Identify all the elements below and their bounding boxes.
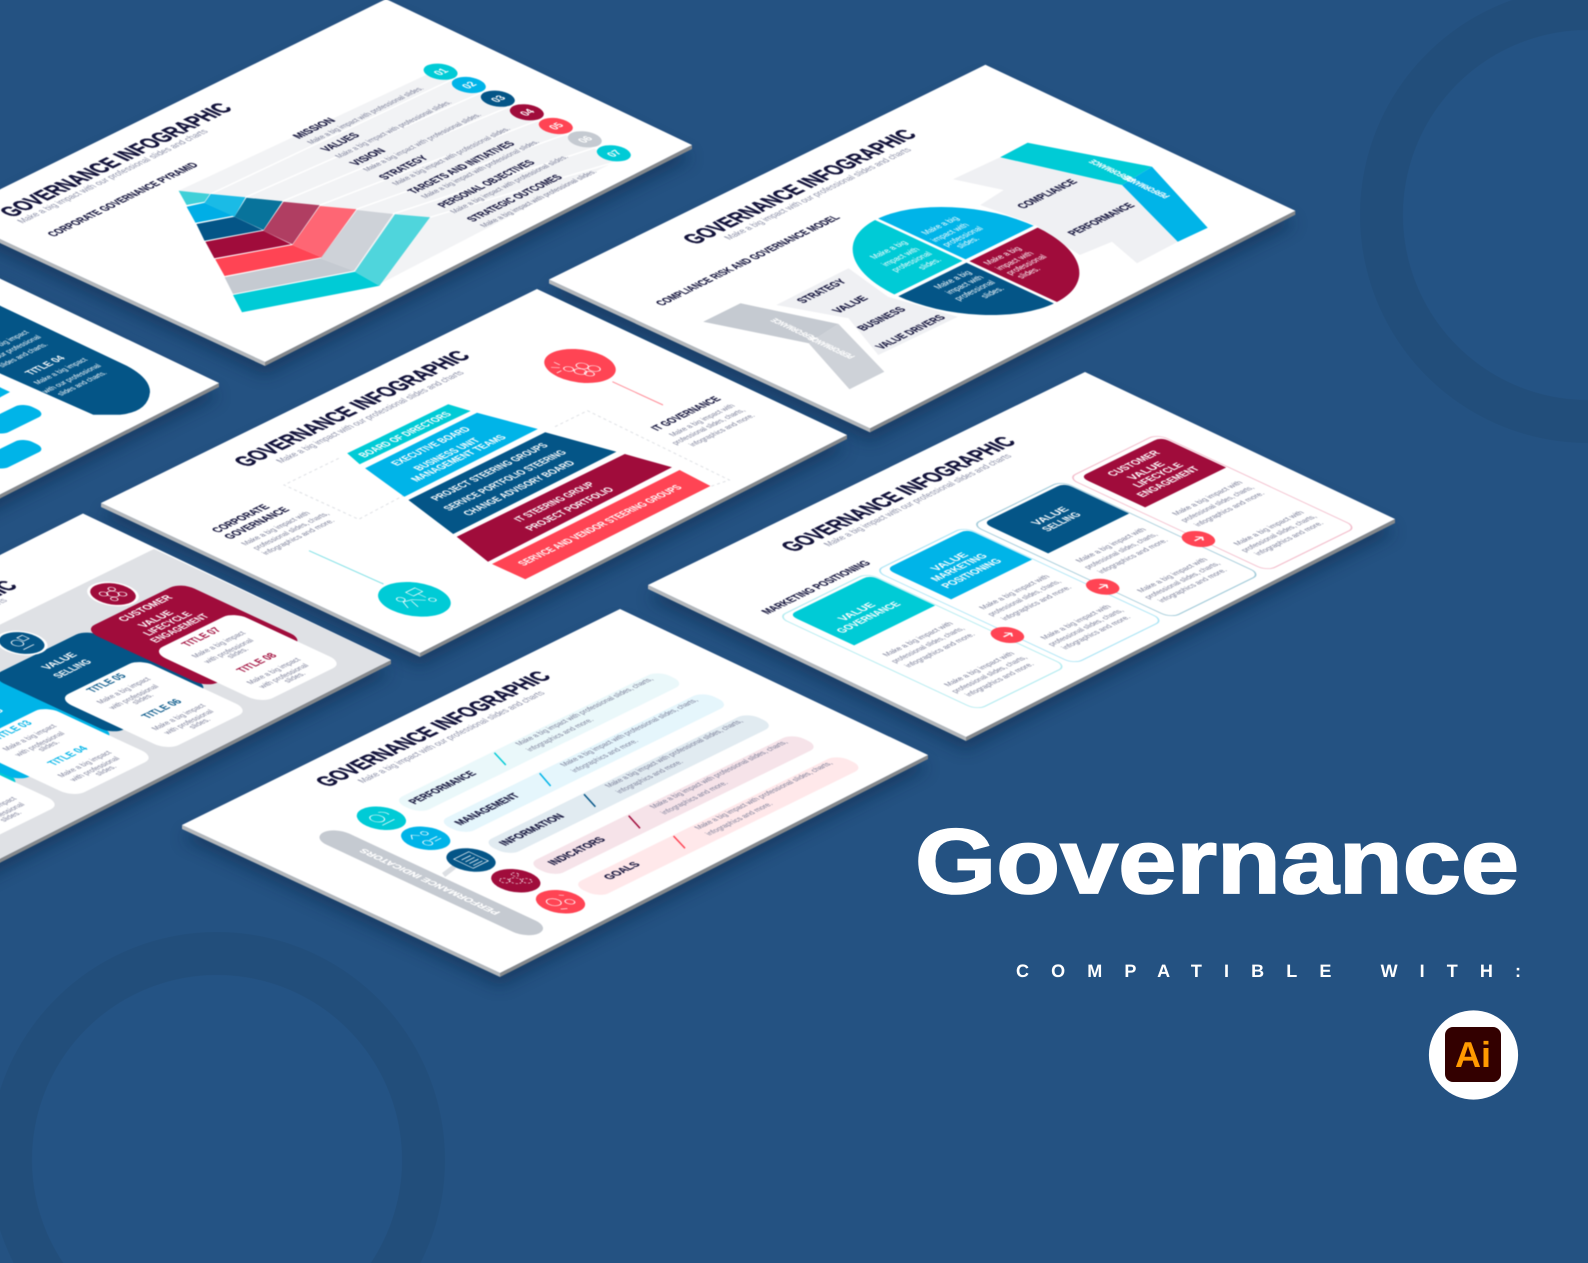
slide title: GOVERNANCE INFOGRAPHIC xyxy=(309,668,557,790)
row labels and descriptions: TARGETS AND INITIATIVES xyxy=(405,140,518,195)
card: customer value lifecycle engagement: TITLE 07 xyxy=(179,626,225,648)
tier labels: BUSINESS UNIT xyxy=(411,436,484,472)
card: customer value lifecycle engagement: Make a big impact with xyxy=(1170,480,1245,517)
row: information: Make a big impact with professional slides, charts, xyxy=(602,718,745,789)
icon: red circle xyxy=(526,885,595,918)
panel: slide pyramid with it governance xyxy=(101,289,847,666)
tier labels: BOARD OF DIRECTORS xyxy=(356,410,455,459)
text block: corporate governance: infographics and more. xyxy=(260,518,337,556)
section heading: COMPLIANCE RISK AND GOVERNANCE MODEL xyxy=(653,214,844,307)
card: customer value lifecycle engagement: CUSTOMER xyxy=(115,594,176,623)
panel: slide compliance risk and governance model xyxy=(549,65,1295,441)
row: goals xyxy=(572,754,864,898)
icon: navy badge xyxy=(0,630,48,656)
text block: corporate governance xyxy=(209,503,337,556)
vertical bar: performance indicators xyxy=(312,827,550,939)
numbered circles 01 to 07: 02 xyxy=(459,80,480,90)
section heading: CORPORATE GOVERNANCE PYRAMID xyxy=(45,161,202,238)
arrow: up right performance: PERFORMANCE xyxy=(1087,158,1139,183)
block text xyxy=(0,329,110,397)
tier labels: MANAGEMENT TEAMS xyxy=(408,434,510,483)
pie chart: slides. xyxy=(1014,266,1043,280)
row: performance xyxy=(393,670,685,814)
icon: maroon badge xyxy=(87,582,139,606)
grey row sheet xyxy=(179,72,625,283)
arrow: lower left performance: STRATEGY xyxy=(794,278,850,305)
card: customer value lifecycle engagement: ENGAGEMENT xyxy=(1134,465,1204,499)
card: customer value lifecycle engagement: slides. xyxy=(281,671,308,684)
card: customer value lifecycle engagement xyxy=(1068,434,1357,571)
card: customer value lifecycle engagement: VALUE xyxy=(135,609,177,629)
card: value selling: VALUE xyxy=(1028,505,1073,527)
card: customer value lifecycle engagement: LIFECYCLE xyxy=(140,610,196,637)
row labels and descriptions xyxy=(290,85,599,228)
row labels and descriptions: Make a big impact with professional slides. xyxy=(333,99,454,159)
card: value selling xyxy=(0,629,250,750)
card: value selling: infographics and more. xyxy=(1095,538,1171,575)
numbered circles 01 to 07: 01 xyxy=(431,67,452,77)
icon: blue circle xyxy=(391,822,460,855)
row labels and descriptions: VALUES xyxy=(318,132,363,153)
card: customer value lifecycle engagement: slides. xyxy=(224,646,251,659)
card: value governance: GOVERNANCE xyxy=(834,600,904,635)
arrow: lower left performance: BUSINESS xyxy=(855,306,909,332)
card: value marketing positioning xyxy=(875,527,1164,664)
arrow: lower left performance: PERFORMANCE xyxy=(806,335,858,360)
arrow: lower left performance xyxy=(703,268,958,389)
arrow: up right performance xyxy=(953,143,1208,263)
icon: red brain circle with leader line xyxy=(530,342,663,405)
card: value selling: professional slides, charts, xyxy=(1082,532,1160,570)
row: indicators: Make a big impact with professional slides, charts, xyxy=(647,739,790,810)
block text: Make a big impact xyxy=(31,357,91,386)
pie chart: slides. xyxy=(915,257,944,271)
card: value marketing positioning: VALUE xyxy=(928,551,972,573)
text block: it governance: infographics and more. xyxy=(687,413,757,448)
card: value selling: SELLING xyxy=(1039,511,1085,533)
tier labels: EXECUTIVE BOARD xyxy=(388,425,474,467)
card: value marketing positioning: POSITIONING xyxy=(939,557,1005,590)
card: value governance: infographics and more. xyxy=(902,632,978,669)
text block: corporate governance: CORPORATE xyxy=(209,503,273,534)
pie chart: professional xyxy=(951,279,998,302)
slide subtitle: Make a big impact with our professional slides and charts xyxy=(722,146,915,241)
row: management: MANAGEMENT xyxy=(452,792,524,827)
slide title: GOVERNANCE INFOGRAPHIC xyxy=(676,126,923,247)
card: value marketing positioning: infographics and more. xyxy=(999,585,1074,622)
panel: slide performance indicators xyxy=(182,609,928,986)
panel: slide corporate governance pyramid xyxy=(0,0,692,375)
numbered circles 01 to 07 xyxy=(417,60,638,165)
pie chart: Make a big xyxy=(981,245,1024,266)
card: value governance: professional slides, charts, xyxy=(889,626,967,664)
section heading: MARKETING POSITIONING xyxy=(759,559,874,616)
row: information xyxy=(483,712,775,856)
text block: it governance: professional slides, charts, xyxy=(669,408,748,446)
arrow: up right performance: COMPLIANCE xyxy=(1015,178,1081,210)
numbered circles 01 to 07: 03 xyxy=(488,94,509,104)
slide subtitle: Make a big impact with our professional slides and charts xyxy=(274,369,468,465)
row: performance: infographics and more. xyxy=(524,717,596,753)
tier labels: IT STEERING GROUP xyxy=(511,481,599,523)
decorative ring: bottom left xyxy=(0,932,446,1263)
row: information: infographics and more. xyxy=(613,759,686,795)
card: value selling: infographics and more. xyxy=(1156,567,1229,604)
icon: adobe illustrator badge: Ai xyxy=(1455,1034,1491,1075)
pie chart: slides. xyxy=(978,285,1007,299)
vertical bar: performance indicators: PERFORMANCE INDICATORS xyxy=(357,847,503,916)
pyramid tiers xyxy=(347,404,710,579)
card: value marketing positioning: MARKETING xyxy=(928,552,991,583)
card: customer value lifecycle engagement: VALUE xyxy=(1124,460,1169,482)
text block: it governance xyxy=(648,395,757,448)
pie chart: impact with xyxy=(879,246,922,267)
slide subtitle: Make a big impact with our professional slides and charts xyxy=(355,690,549,785)
icon: teal circle xyxy=(347,802,416,835)
pie chart: impact with xyxy=(928,222,972,243)
icon: navy circle xyxy=(436,843,506,877)
card: customer value lifecycle engagement: Make a big impact with xyxy=(1231,510,1306,547)
card: customer value lifecycle engagement: professional slides, charts, xyxy=(1238,514,1319,553)
compatible with label: COMPATIBLE WITH: xyxy=(1016,961,1521,981)
row labels and descriptions: Make a big impact with professional slides. xyxy=(361,112,484,172)
card: customer value lifecycle engagement: infographics and more. xyxy=(1252,520,1326,557)
card: blue stage: with professional xyxy=(11,730,67,758)
arrow: up right performance: PERFORMANCE xyxy=(1121,175,1173,199)
card: value selling: Make a big impact with xyxy=(1135,557,1210,594)
row: information: INFORMATION xyxy=(497,812,568,847)
row: management: infographics and more. xyxy=(569,738,641,774)
text block: it governance: Make a big impact with xyxy=(667,403,737,438)
pie chart: professional xyxy=(888,250,935,273)
card: value marketing positioning: professional slides, charts, xyxy=(1045,608,1126,647)
card: blue stage: with professional xyxy=(66,755,122,783)
icon: adobe illustrator badge xyxy=(1429,1010,1518,1100)
card: blue stage: TITLE 04 xyxy=(45,744,92,767)
card: customer value lifecycle engagement: TITLE 08 xyxy=(234,652,280,674)
block text: TITLE 04 xyxy=(22,354,69,377)
numbered circles 01 to 07: 07 xyxy=(604,149,625,159)
arrow: lower left performance: VALUE xyxy=(830,294,872,315)
card: value selling: with professional xyxy=(160,708,216,736)
block text: with our professional xyxy=(39,363,104,395)
card: value governance: VALUE xyxy=(835,601,879,623)
card: blue stage: slides. xyxy=(92,764,119,777)
row labels and descriptions: VISION xyxy=(347,147,389,167)
slide subtitle: Make a big impact with our professional slides and charts xyxy=(821,453,1015,548)
row: indicators xyxy=(527,733,820,877)
card: customer value lifecycle engagement: infographics and more. xyxy=(1192,491,1267,528)
row labels and descriptions: STRATEGY xyxy=(376,154,432,181)
card: value selling: TITLE 06 xyxy=(139,698,185,720)
pie chart: impact with xyxy=(993,250,1036,271)
pie chart xyxy=(803,183,1129,339)
arrow: lower left performance: VALUE DRIVERS xyxy=(873,314,949,351)
pie chart: professional xyxy=(939,225,986,248)
row: goals: GOALS xyxy=(601,861,644,881)
row: management: Make a big impact with professional slides, charts, xyxy=(558,697,700,768)
row: indicators: infographics and more. xyxy=(658,780,731,816)
card: value marketing positioning: Make a big impact with xyxy=(977,574,1052,611)
row: goals: infographics and more. xyxy=(703,801,775,837)
card: value marketing positioning: Make a big impact with xyxy=(1038,604,1113,641)
card: customer value lifecycle engagement: CUSTOMER xyxy=(1104,449,1164,478)
slide title: GOVERNANCE INFOGRAPHIC xyxy=(0,100,238,220)
panel: partial slide with blue titles xyxy=(0,278,220,513)
arrow: lower left performance: PERFORMANCE xyxy=(769,317,820,341)
card: customer value lifecycle engagement: Make a big impact xyxy=(244,656,304,685)
card: value governance xyxy=(778,573,1067,710)
dashed connectors xyxy=(284,411,729,519)
card: value marketing positioning: infographics and more. xyxy=(1059,614,1133,651)
blue bars xyxy=(0,386,42,470)
text block: it governance: IT GOVERNANCE xyxy=(648,395,724,432)
slide title: GOVERNANCE INFOGRAPHIC xyxy=(227,348,476,470)
card: value governance: professional slides, charts, xyxy=(949,655,1030,694)
card: customer value lifecycle engagement: ENGAGEMENT xyxy=(147,612,213,644)
pie chart: Make a big xyxy=(867,239,910,260)
pie chart: impact with xyxy=(943,274,986,295)
slide title: GOVERNANCE INFOGRAPHIC xyxy=(774,433,1022,555)
pyramid chart xyxy=(179,191,430,312)
numbered circles 01 to 07: 06 xyxy=(575,135,596,145)
card: value selling: slides. xyxy=(129,692,156,705)
text block: corporate governance: GOVERNANCE xyxy=(222,506,293,541)
tier labels: SERVICE AND VENDOR STEERING GROUPS xyxy=(515,484,686,567)
tier labels: PROJECT STEERING GROUPS xyxy=(428,442,552,502)
card: blue stage: Make a big impact xyxy=(0,723,60,752)
tier labels: PROJECT PORTFOLIO xyxy=(523,486,617,532)
row labels and descriptions: MISSION xyxy=(290,117,339,140)
card: customer value lifecycle engagement: with professional xyxy=(200,637,256,665)
card: customer value lifecycle engagement: Make a big impact xyxy=(189,630,249,659)
row: goals: Make a big impact with professional slides, charts, xyxy=(692,760,835,831)
tier labels: SERVICE PORTFOLIO STEERING xyxy=(440,449,570,512)
block text: slides and charts. xyxy=(55,370,110,397)
panel: partial slide value chain on grey xyxy=(0,514,391,890)
card: value selling: professional slides, charts, xyxy=(1142,561,1223,600)
card: blue stage xyxy=(0,676,156,797)
card: value selling: Make a big impact xyxy=(149,702,209,731)
row: management xyxy=(438,691,730,835)
card: customer value lifecycle engagement: LIFECYCLE xyxy=(1130,461,1187,489)
card: value selling: TITLE 05 xyxy=(84,672,130,694)
row labels and descriptions: Make a big impact with professional slides. xyxy=(448,154,571,214)
tier labels xyxy=(356,410,686,567)
row labels and descriptions: Make a big impact with professional slides. xyxy=(305,85,426,145)
numbered circles 01 to 07: 04 xyxy=(517,107,539,118)
pie chart: Make a big xyxy=(918,215,962,236)
card: value selling: with professional xyxy=(105,683,161,711)
card: value selling: Make a big impact with xyxy=(1073,527,1149,564)
decorative ring: top right xyxy=(1360,0,1588,444)
slide subtitle: Make a big impact with our professional slides and charts xyxy=(15,128,212,225)
card: value selling: Make a big impact xyxy=(94,676,154,705)
row labels and descriptions: PERSONAL OBJECTIVES xyxy=(435,159,539,209)
card: value governance: infographics and more. xyxy=(963,661,1036,698)
row labels and descriptions: Make a big impact with professional slides. xyxy=(390,126,513,186)
card: teal stage xyxy=(0,772,55,834)
icon: maroon circle xyxy=(481,864,550,897)
card: value selling: SELLING xyxy=(50,658,95,680)
row: indicators: INDICATORS xyxy=(545,836,609,867)
navy rounded block xyxy=(0,301,150,415)
card: value marketing positioning: professional slides, charts, xyxy=(985,579,1063,617)
row labels and descriptions: Make a big impact with professional slides. xyxy=(478,169,599,228)
card: value governance: Make a big impact with xyxy=(942,651,1017,688)
panel: slide marketing positioning steps xyxy=(648,372,1395,750)
text block: corporate governance: Make a big impact with xyxy=(239,510,313,547)
card: customer value lifecycle engagement xyxy=(84,582,344,703)
card: blue stage: slides. xyxy=(35,739,62,752)
row: performance: PERFORMANCE xyxy=(406,770,480,806)
card: value governance: Make a big impact with xyxy=(880,621,956,658)
main heading: Governance xyxy=(915,811,1519,913)
pie chart: professional xyxy=(1003,253,1049,276)
icon: red arrow buttons xyxy=(984,528,1222,646)
arrow: up right performance: PERFORMANCE xyxy=(1065,202,1138,237)
card: blue stage: Make a big impact xyxy=(55,749,115,778)
card: value selling: VALUE xyxy=(39,651,81,671)
card: value selling xyxy=(972,481,1261,618)
row labels and descriptions: Make a big impact with professional slides. xyxy=(419,139,542,199)
icon: teal figure circle with leader line xyxy=(309,551,465,624)
card: customer value lifecycle engagement: professional slides, charts, xyxy=(1178,485,1256,523)
pie chart: slides. xyxy=(953,235,982,249)
numbered circles 01 to 07: 05 xyxy=(546,121,567,131)
row labels and descriptions: STRATEGIC OUTCOMES xyxy=(464,174,566,223)
row: performance: Make a big impact with professional slides, charts, xyxy=(513,676,656,747)
pie chart: Make a big xyxy=(931,269,974,290)
grey background band xyxy=(0,549,391,877)
card: customer value lifecycle engagement: with professional xyxy=(255,662,311,690)
text block: corporate governance: professional slides, charts, xyxy=(250,511,332,551)
card: value selling: slides. xyxy=(186,717,213,730)
tier labels: CHANGE ADVISORY BOARD xyxy=(460,459,579,517)
